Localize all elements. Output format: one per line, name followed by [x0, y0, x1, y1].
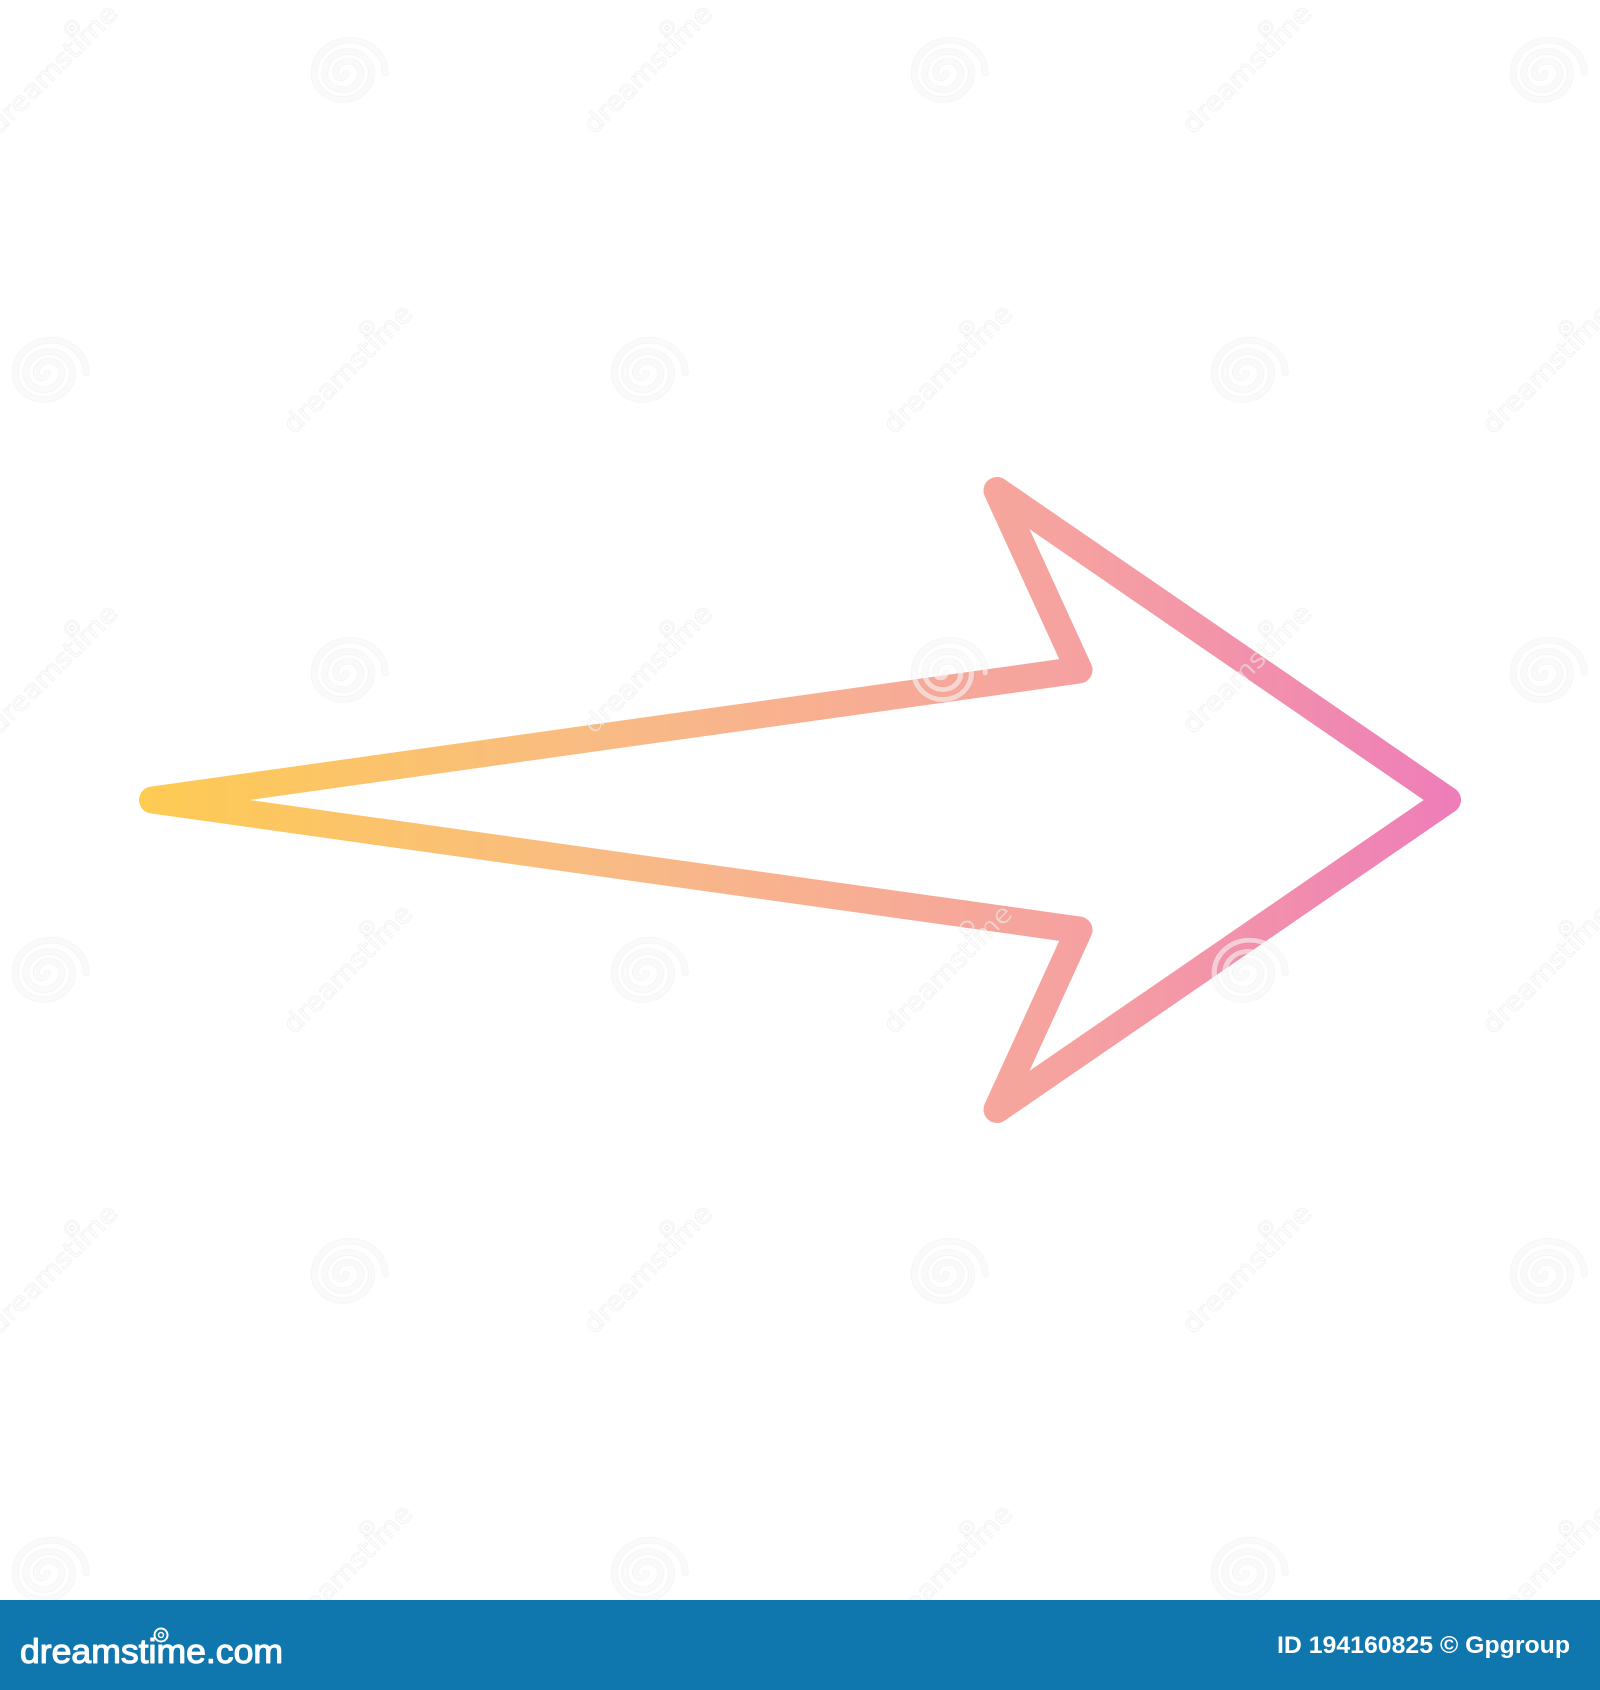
watermark: diagonal text: dreamstime	[878, 899, 1019, 1040]
watermark: diagonal text: dreamstime	[878, 1499, 1019, 1640]
watermark: diagonal text: dreamstime	[278, 299, 419, 440]
watermark: diagonal text: dreamstime	[578, 0, 719, 140]
watermark: diagonal text: dreamstime	[1177, 1199, 1318, 1340]
arrow outline with yellow to pink gradient	[152, 490, 1448, 1110]
watermark: diagonal text: dreamstime	[578, 1199, 719, 1340]
watermark: diagonal text: dreamstime	[278, 899, 419, 1040]
watermark: diagonal text: dreamstime	[578, 599, 719, 740]
footer logo: dreamstime.com	[20, 1633, 283, 1671]
watermark: diagonal text: dreamstime	[878, 299, 1019, 440]
footer bar	[0, 1600, 1600, 1690]
footer credit: ID 194160825 © Gpgroup	[1277, 1632, 1570, 1659]
watermark: diagonal text: dreamstime	[1177, 599, 1318, 740]
watermark: diagonal text: dreamstime	[278, 1499, 419, 1640]
watermark: diagonal text: dreamstime	[1177, 0, 1318, 140]
